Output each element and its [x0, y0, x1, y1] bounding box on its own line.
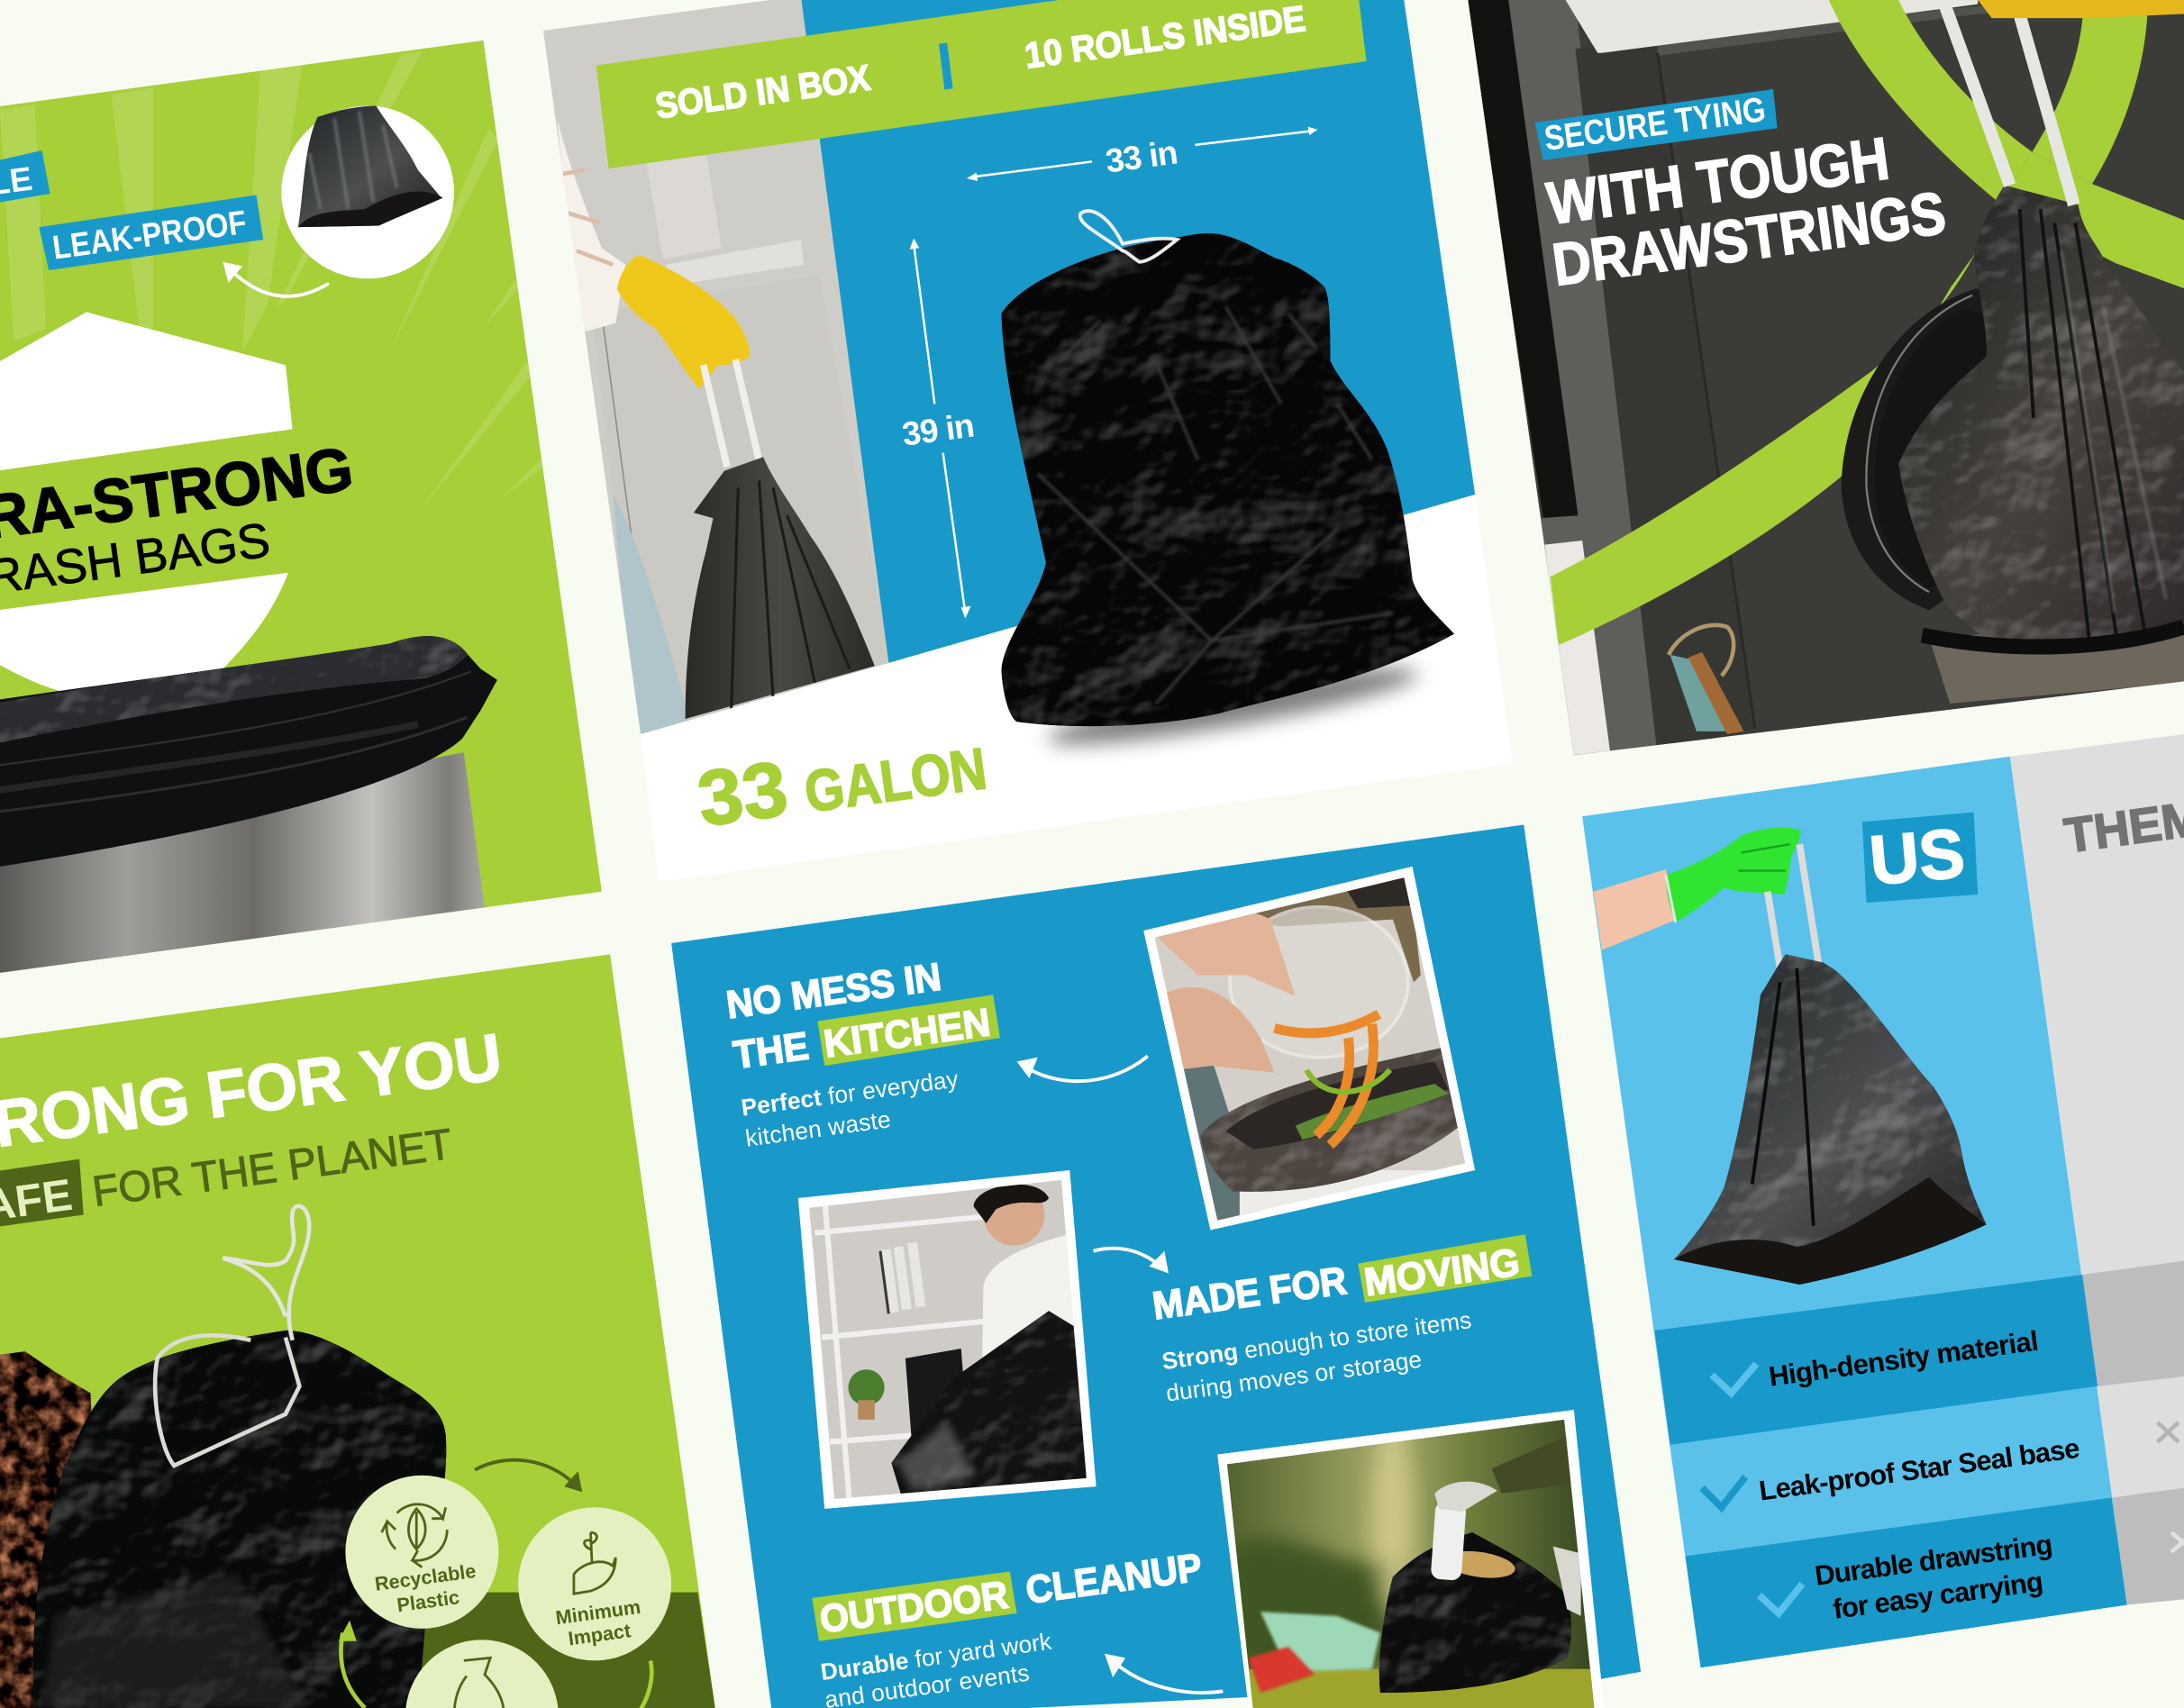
panel: use cases — [671, 825, 1641, 1708]
row: high-density material — [1655, 1275, 2098, 1445]
arrow: bag to leak-proof — [223, 262, 327, 296]
panel: us vs them comparison — [1582, 734, 2184, 1667]
heading: outdoor cleanup: OUTDOOR — [817, 1574, 1011, 1641]
badge: recyclable plastic — [345, 1476, 498, 1629]
metal trash can with liner — [0, 636, 497, 977]
arrow: outdoor photo to text — [1105, 1654, 1223, 1693]
panel: strong for you, safe for the planet — [0, 954, 716, 1708]
column: them — [2010, 734, 2184, 1605]
heading: outdoor cleanup — [812, 1546, 1205, 1641]
panel: extra-strong trash bags — [0, 41, 602, 977]
photo: hand carrying bag — [536, 0, 898, 745]
white hexagon badge — [0, 312, 293, 696]
text: outdoor description: Durable for yard work — [819, 1628, 1054, 1685]
arrow: recyclable to minimum impact — [475, 1460, 582, 1492]
tag: durable — [0, 150, 50, 219]
drawstring bag — [1898, 186, 2184, 643]
badge: minimum impact: Impact — [567, 1619, 632, 1649]
column: us — [1582, 757, 2127, 1667]
label: 33 gallon: 33 — [693, 745, 793, 843]
heading: with tough drawstrings — [1543, 125, 1950, 299]
green ribbons — [1551, 0, 2184, 645]
heading: no mess in the kitchen: KITCHEN — [822, 1001, 993, 1067]
tag: leak-proof: LEAK-PROOF — [50, 203, 249, 267]
label: 33 gallon — [693, 735, 990, 843]
icon: hand with sprout — [574, 1532, 615, 1594]
heading: with tough drawstrings: WITH TOUGH — [1543, 125, 1893, 238]
us bag with handles — [1674, 844, 1986, 1285]
black bag with tie — [33, 1206, 446, 1708]
dimension: width 33 in: 33 in — [1103, 132, 1180, 180]
circle: bag base detail — [281, 106, 454, 278]
photo: moving — [798, 1170, 1097, 1509]
row: durable drawstring: for easy carrying — [1831, 1566, 2045, 1625]
row: high-density material: High-density material — [1767, 1325, 2041, 1393]
badge: minimum impact: Minimum — [554, 1595, 642, 1629]
badge: minimum impact — [518, 1507, 671, 1660]
heading: no mess in the kitchen: NO MESS IN — [723, 956, 943, 1027]
arrow: next to recyclable — [339, 1621, 365, 1708]
badge: recyclable plastic: Recyclable — [373, 1559, 478, 1595]
heading: no mess in the kitchen — [723, 956, 1000, 1077]
heading: made for moving — [1150, 1234, 1533, 1328]
soil pile — [0, 1351, 92, 1708]
panel: secure tying photo — [1462, 0, 2184, 759]
text: moving description: Strong enough to store items — [1160, 1306, 1473, 1375]
dark green base — [418, 1593, 716, 1708]
row: durable drawstring — [1686, 1497, 2127, 1667]
arrow: moving photo to text — [1094, 1249, 1169, 1273]
arrow: kitchen photo to text — [1017, 1056, 1148, 1081]
dimension: height 39 in — [900, 238, 977, 619]
text: kitchen description — [740, 1065, 960, 1152]
arrow: minimum impact to next — [638, 1660, 651, 1708]
heading: made for moving: MADE FOR — [1150, 1259, 1349, 1328]
text: moving description: during moves or storage — [1164, 1346, 1424, 1407]
heading: made for moving: MOVING — [1361, 1240, 1522, 1304]
tag: secure tying: SECURE TYING — [1542, 90, 1768, 159]
badge: recyclable plastic: Plastic — [396, 1585, 460, 1616]
tag: us: US — [1867, 814, 1968, 900]
label: 33 gallon: GALON — [801, 735, 990, 824]
panel: size and box — [536, 0, 1513, 882]
icon: recycle leaf — [382, 1504, 447, 1567]
band: sold in box: SOLD IN BOX — [653, 58, 873, 126]
text: kitchen description: kitchen waste — [743, 1105, 892, 1152]
band: sold in box — [596, 0, 1367, 168]
trash can rim — [1842, 288, 1983, 611]
heading: no mess in the kitchen: THE — [731, 1024, 811, 1077]
subheading: for the planet: FOR THE PLANET — [89, 1121, 455, 1216]
photo: full black bag — [1002, 211, 1454, 759]
text: kitchen description: Perfect for everyday — [740, 1065, 960, 1122]
badge: partial bag icon — [405, 1640, 559, 1708]
white floor — [641, 495, 1513, 882]
photo: kitchen waste — [1142, 864, 1477, 1231]
photo: outdoor cleanup — [1217, 1410, 1605, 1708]
text: moving description — [1160, 1306, 1473, 1407]
heading: outdoor cleanup: CLEANUP — [1024, 1546, 1205, 1613]
dimension: width 33 in — [967, 127, 1317, 181]
row: durable drawstring: Durable drawstring — [1813, 1529, 2054, 1592]
heading: with tough drawstrings: DRAWSTRINGS — [1549, 180, 1950, 299]
dimension: height 39 in: 39 in — [900, 405, 977, 453]
row: leak-proof star seal base: Leak-proof Star Seal base — [1757, 1432, 2081, 1507]
arm with green glove — [1594, 827, 1801, 950]
